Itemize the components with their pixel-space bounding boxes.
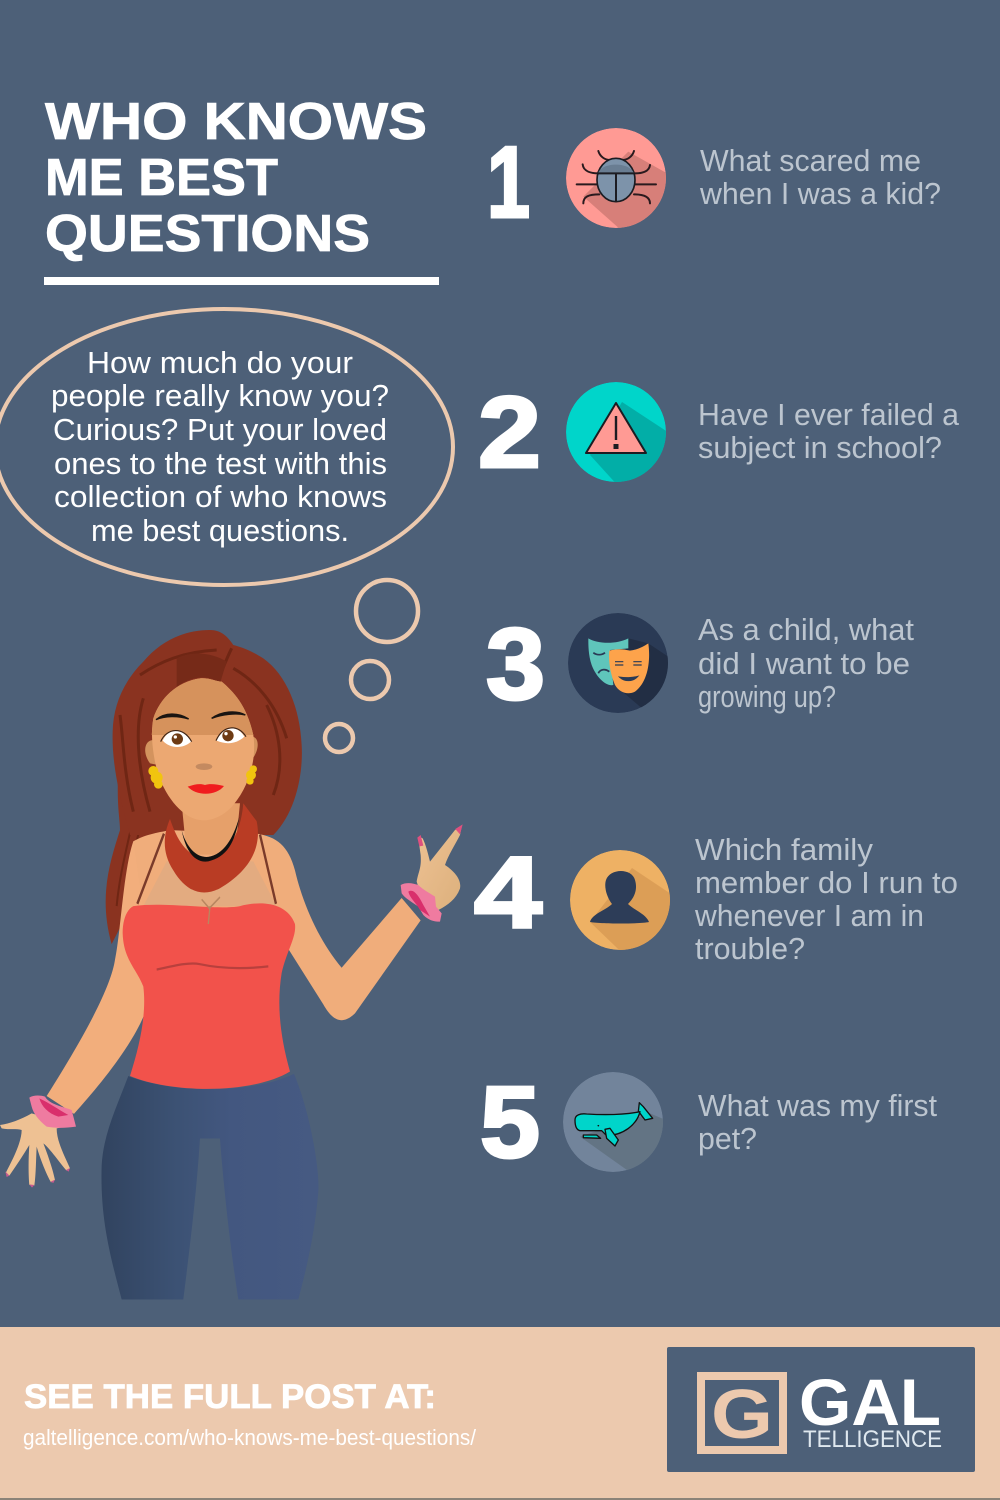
title: QUESTIONS	[45, 205, 370, 263]
question 4: member do I run to	[695, 865, 958, 900]
question 4	[694, 832, 958, 966]
question 3	[698, 612, 914, 714]
intro text: ones to the test with this	[54, 446, 387, 481]
question 4: trouble?	[695, 931, 805, 966]
woman illustration	[0, 630, 463, 1299]
question 2: subject in school?	[698, 430, 942, 465]
question 4: whenever I am in	[694, 898, 924, 933]
question 3: did I want to be	[698, 646, 910, 681]
thought bubbles	[325, 580, 418, 752]
number 4: 4	[474, 837, 542, 949]
icon: warning triangle	[566, 382, 666, 482]
speech bubble	[0, 309, 453, 585]
question 5: What was my first	[698, 1088, 937, 1123]
intro text: people really know you?	[51, 378, 389, 413]
number 3: 3	[486, 609, 545, 721]
logo: TELLIGENCE	[803, 1426, 942, 1453]
icon: theatre masks	[568, 613, 668, 713]
item 3	[486, 613, 914, 714]
title underline	[44, 277, 439, 285]
number 2: 2	[478, 377, 541, 489]
question 2	[698, 397, 960, 465]
title	[45, 93, 427, 263]
footer url: galtelligence.com/who-knows-me-best-questions/	[23, 1425, 477, 1450]
item 5	[482, 1072, 937, 1172]
icon: whale	[563, 1072, 663, 1172]
title: ME BEST	[45, 149, 278, 207]
item 4	[474, 838, 957, 960]
item 2	[480, 382, 959, 482]
intro text: collection of who knows	[54, 479, 387, 514]
item 1	[490, 128, 940, 228]
title: WHO KNOWS	[45, 93, 427, 151]
logo: GAL	[799, 1365, 941, 1439]
intro text: Curious? Put your loved	[53, 412, 387, 447]
intro text	[51, 345, 389, 548]
question 5: pet?	[698, 1121, 757, 1156]
icon: person silhouette	[570, 850, 670, 950]
number 5: 5	[480, 1067, 540, 1179]
question 3: growing up?	[698, 679, 836, 714]
question 1: when I was a kid?	[699, 176, 941, 211]
footer band	[0, 1327, 1000, 1500]
logo	[667, 1347, 975, 1472]
number 1: 1	[487, 127, 530, 239]
question 2: Have I ever failed a	[698, 397, 960, 432]
logo: G	[711, 1375, 773, 1453]
question 4: Which family	[695, 832, 873, 867]
intro text: How much do your	[87, 345, 353, 380]
question 5	[698, 1088, 937, 1156]
footer call to action: SEE THE FULL POST AT:	[24, 1378, 436, 1416]
intro text: me best questions.	[91, 513, 349, 548]
question 3: As a child, what	[698, 612, 914, 647]
icon: beetle	[566, 128, 666, 228]
question 1	[699, 143, 941, 211]
question 1: What scared me	[700, 143, 921, 178]
